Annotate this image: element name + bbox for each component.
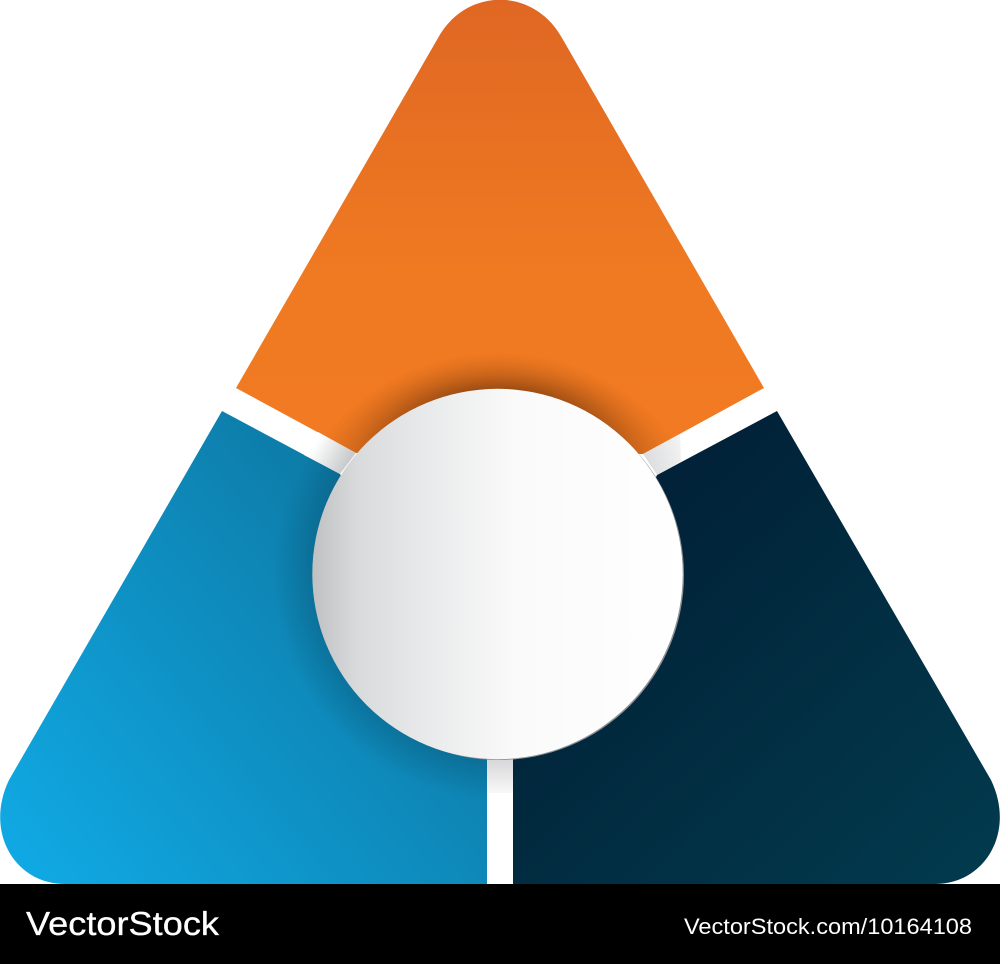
watermark logo text: VectorStock: [26, 906, 219, 943]
black footer bar: [0, 884, 1000, 964]
gap shadows: [304, 432, 681, 793]
center circle: [312, 389, 684, 760]
watermark url text: VectorStock.com/10164108: [684, 914, 972, 939]
blue left segment: [0, 411, 487, 884]
navy right segment: [513, 411, 1000, 884]
orange top segment: [236, 0, 764, 454]
